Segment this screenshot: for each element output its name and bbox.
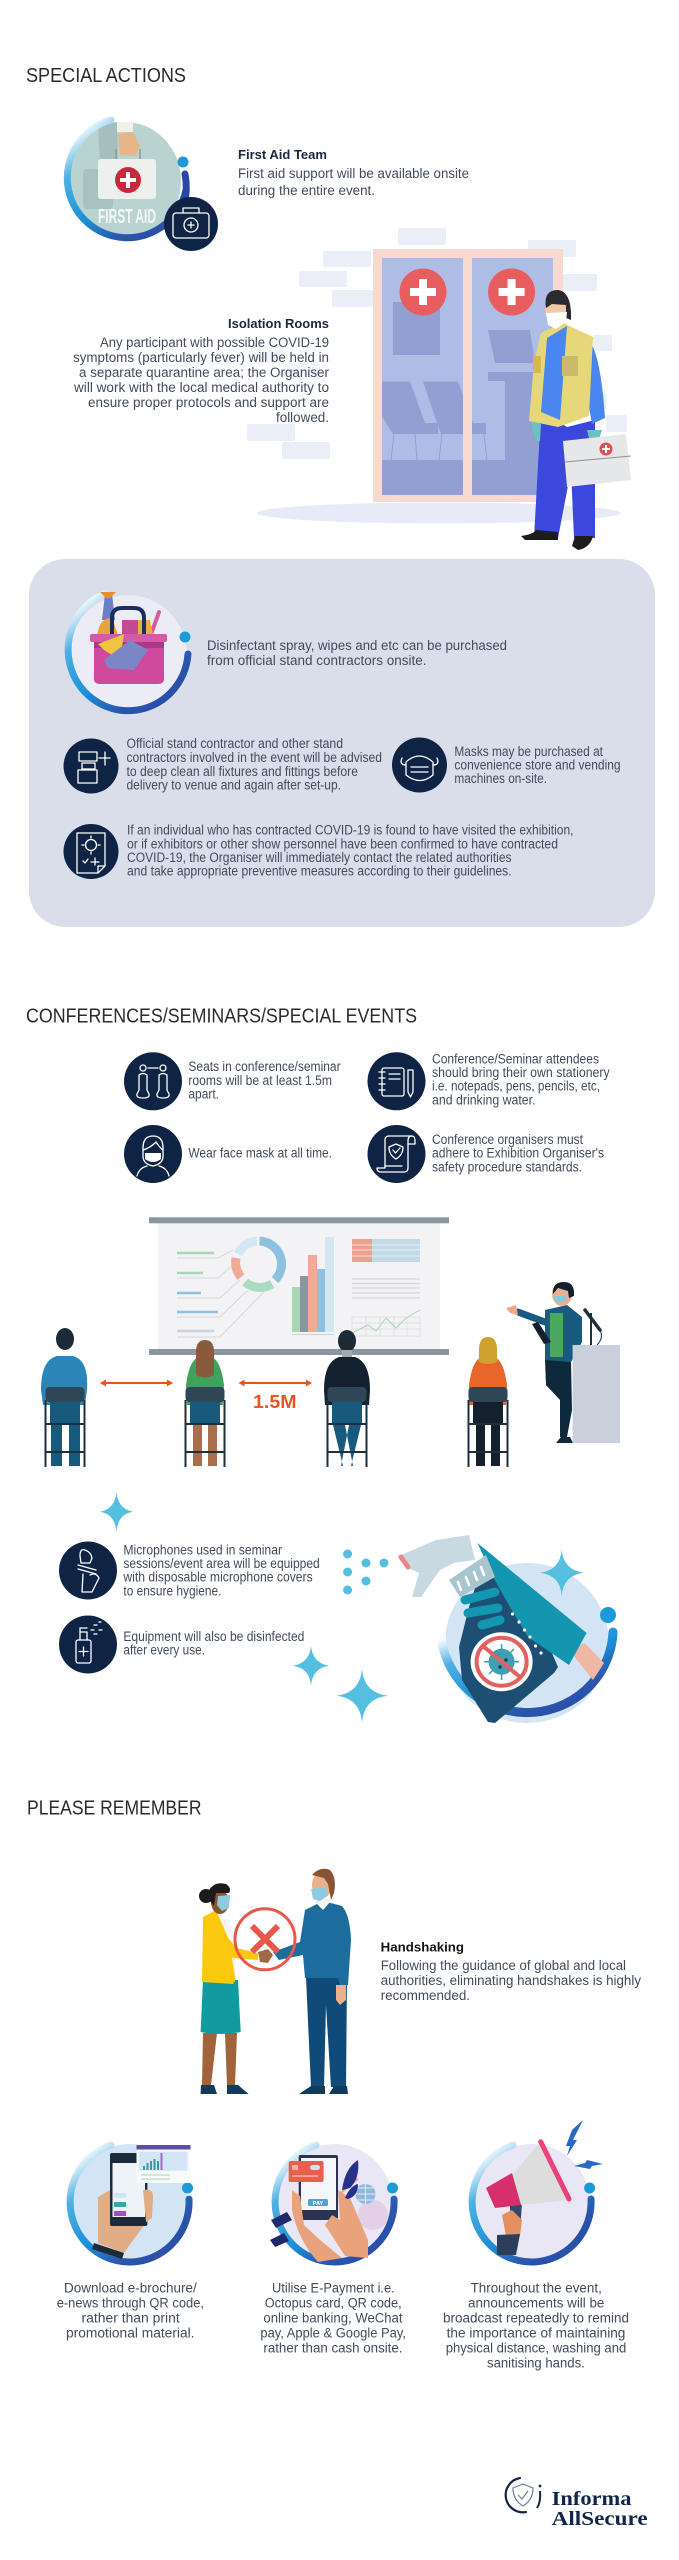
virus prohibited badge <box>471 1632 533 1691</box>
text: isolation rooms: ensure proper protocols and support are <box>88 395 329 410</box>
text: announcements: Throughout the event, <box>471 2281 602 2296</box>
text: deep clean: delivery to venue and again after set-up. <box>126 778 341 792</box>
icon: sparkle top <box>100 1492 133 1532</box>
text: stationery: Conference/Seminar attendees <box>432 1051 599 1066</box>
attendee 4 <box>468 1337 508 1467</box>
text: e-brochure <box>57 2281 204 2341</box>
icon: sparkle small <box>293 1646 329 1686</box>
icon: mask <box>392 738 447 792</box>
presentation screen <box>149 1217 449 1355</box>
attendee 1 <box>41 1328 87 1467</box>
text: e-payment: rather than cash onsite. <box>263 2341 402 2356</box>
icon: e-payment: PAY <box>313 2201 324 2207</box>
icon: e-brochure phone <box>70 2144 193 2264</box>
text: deep clean <box>126 736 382 792</box>
text: microphones <box>122 1542 320 1598</box>
text: covid contact: If an individual who has contracted COVID-19 is found to have visited the exhibition, <box>127 823 574 838</box>
text: deep clean: Official stand contractor and other stand <box>126 736 343 751</box>
text: first aid team <box>238 147 469 198</box>
text: announcements <box>443 2281 629 2371</box>
text: deep clean: contractors involved in the event will be advised <box>126 750 382 765</box>
text: e-brochure: rather than print <box>82 2311 180 2326</box>
heading: special actions: SPECIAL ACTIONS <box>26 64 186 87</box>
text: stationery: should bring their own stationery <box>432 1065 610 1080</box>
text: masks: convenience store and vending <box>454 758 621 773</box>
text: deep clean: to deep clean all fixtures and fittings before <box>126 764 358 779</box>
icon: microphone cover <box>59 1542 117 1600</box>
text: announcements: broadcast repeatedly to remind <box>443 2311 629 2326</box>
text: seats <box>188 1059 341 1102</box>
text: e-payment: pay, Apple & Google Pay, <box>260 2326 406 2341</box>
icon: deep clean <box>64 738 118 794</box>
arrow: distance left <box>100 1380 173 1386</box>
text: announcements: the importance of maintaining <box>447 2326 625 2341</box>
text: wear mask: Wear face mask at all time. <box>188 1145 332 1160</box>
arrow: distance right <box>238 1380 312 1386</box>
icon: sparkle on circle <box>540 1550 584 1596</box>
text: covid contact: or if exhibitors or other show personnel have been confirmed to have contracted <box>127 836 558 851</box>
text: first aid team: during the entire event. <box>238 183 375 198</box>
text: isolation rooms: symptoms (particularly fever) will be held in <box>73 350 329 365</box>
text: disinfectant: from official stand contractors onsite. <box>207 653 426 668</box>
icon: sparkle large <box>336 1669 388 1723</box>
text: stationery <box>432 1051 610 1107</box>
icon: seat distance <box>124 1052 182 1110</box>
text: handshaking <box>381 1940 641 2003</box>
figure: speaker at podium <box>506 1282 620 1443</box>
icon: first aid badge: FIRST AID <box>98 206 156 228</box>
logo: informa allsecure: AllSecure <box>552 2508 648 2530</box>
prohibited sign <box>235 1909 295 1970</box>
illustration: disinfectant spray <box>343 1535 616 1723</box>
illustration: seminar room <box>41 1217 620 1467</box>
icon: report document <box>64 824 118 879</box>
heading: please remember: PLEASE REMEMBER <box>27 1796 202 1819</box>
text: isolation rooms: Any participant with possible COVID-19 <box>100 335 329 350</box>
text: seats: rooms will be at least 1.5m <box>188 1073 332 1088</box>
text: covid contact <box>127 823 574 879</box>
text: e-brochure: Download e-brochure/ <box>64 2281 197 2296</box>
text: masks <box>454 744 621 786</box>
heading: conferences: CONFERENCES/SEMINARS/SPECIAL EVENTS <box>26 1005 417 1028</box>
text: microphones: with disposable microphone covers <box>122 1570 313 1585</box>
figure: medic <box>521 290 631 550</box>
text: microphones: sessions/event area will be equipped <box>123 1556 320 1571</box>
text: equipment <box>123 1629 304 1658</box>
text: announcements: announcements will be <box>468 2296 604 2311</box>
label: 1.5M: 1.5M <box>253 1391 296 1412</box>
attendee 2 <box>186 1340 224 1467</box>
icon: face mask person <box>124 1125 182 1183</box>
text: handshaking: Following the guidance of global and local <box>381 1958 626 1973</box>
text: masks: Masks may be purchased at <box>454 744 603 759</box>
text: seats: Seats in conference/seminar <box>188 1059 341 1074</box>
icon: cleaning bucket <box>68 592 190 715</box>
text: e-brochure: e-news through QR code, <box>57 2296 204 2311</box>
text: disinfectant: Disinfectant spray, wipes and etc can be purchased <box>207 638 507 653</box>
text: e-payment <box>260 2281 406 2356</box>
text: disinfectant <box>207 638 507 668</box>
text: isolation rooms: Isolation Rooms <box>228 316 329 331</box>
icon: procedure scroll <box>368 1125 426 1183</box>
text: covid contact: COVID-19, the Organiser will immediately contact the related authorities <box>127 850 512 865</box>
text: e-payment: Octopus card, QR code, <box>265 2296 402 2311</box>
icon: spray bottle <box>59 1616 117 1674</box>
text: covid contact: and take appropriate preventive measures according to their guidelines. <box>127 864 512 879</box>
logo: informa allsecure: Informa <box>552 2488 632 2510</box>
text: e-payment: online banking, WeChat <box>263 2311 403 2326</box>
icon: megaphone <box>472 2120 603 2264</box>
logo: informa allsecure <box>506 2478 648 2530</box>
text: microphones: to ensure hygiene. <box>123 1583 222 1598</box>
text: e-brochure: promotional material. <box>66 2326 194 2341</box>
text: handshaking: authorities, eliminating handshakes is highly <box>381 1973 641 1988</box>
text: masks: machines on-site. <box>454 771 547 786</box>
text: isolation rooms <box>73 316 329 425</box>
figure: man <box>273 1869 351 2094</box>
text: organisers: safety procedure standards. <box>432 1159 582 1174</box>
illustration: isolation room with medic <box>247 228 631 550</box>
text: isolation rooms: will work with the local medical authority to <box>73 380 329 395</box>
text: first aid team: First Aid Team <box>238 147 327 162</box>
text: equipment: Equipment will also be disinfected <box>123 1629 304 1644</box>
text: announcements: physical distance, washing and <box>446 2341 626 2356</box>
text: handshaking: Handshaking <box>381 1940 464 1955</box>
text: announcements: sanitising hands. <box>487 2356 585 2371</box>
text: organisers <box>432 1132 604 1174</box>
text: isolation rooms: followed. <box>276 410 329 425</box>
panel: hygiene supplies <box>29 559 655 927</box>
text: isolation rooms: a separate quarantine area; the Organiser <box>79 365 329 380</box>
text: equipment: after every use. <box>123 1643 205 1658</box>
icon: notebook <box>368 1052 426 1110</box>
text: organisers: adhere to Exhibition Organiser's <box>432 1146 604 1161</box>
text: microphones: Microphones used in seminar <box>123 1542 282 1557</box>
text: seats: apart. <box>188 1087 219 1102</box>
text: first aid team: First aid support will be available onsite <box>238 166 469 181</box>
text: stationery: i.e. notepads, pens, pencils, etc, <box>432 1079 600 1094</box>
text: handshaking: recommended. <box>381 1988 470 2003</box>
icon: e-payment <box>270 2144 398 2264</box>
handshake <box>258 1949 273 1963</box>
attendee 3 <box>324 1330 370 1467</box>
illustration: no handshaking <box>199 1869 351 2094</box>
text: stationery: and drinking water. <box>432 1092 536 1107</box>
figure: woman <box>199 1883 258 2094</box>
text: organisers: Conference organisers must <box>432 1132 583 1147</box>
text: e-payment: Utilise E-Payment i.e. <box>272 2281 395 2296</box>
icon: first aid badge <box>67 120 218 251</box>
